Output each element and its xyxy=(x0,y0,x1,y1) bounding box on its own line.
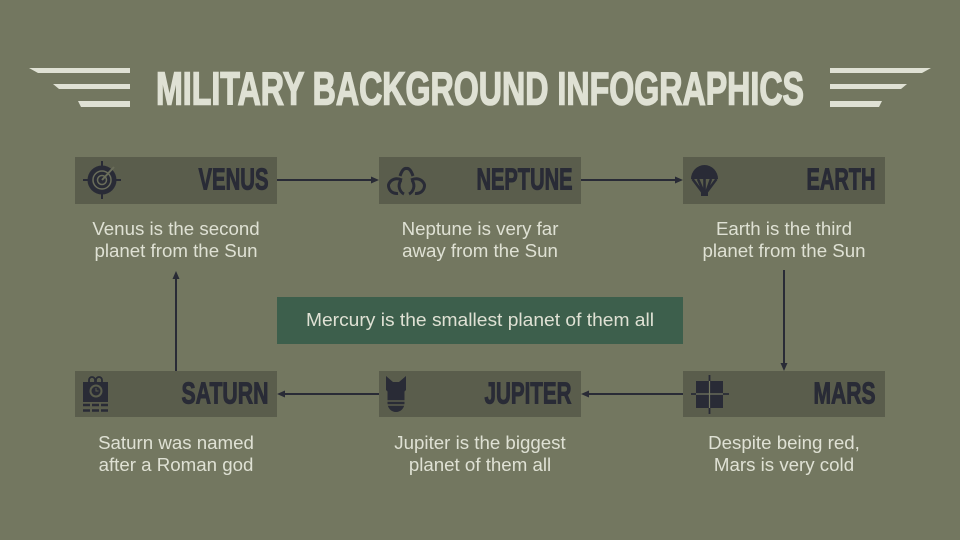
panel: Jupiter xyxy=(379,371,581,417)
text: Neptune description: Neptune is very far xyxy=(402,218,558,239)
text: Venus description: Venus is the second xyxy=(92,218,260,239)
arrow: Neptune to Earth xyxy=(581,176,683,184)
left wing decoration xyxy=(29,68,130,107)
text: Venus description: planet from the Sun xyxy=(94,240,258,261)
icon: handcuffs xyxy=(388,168,425,194)
arrow: Venus to Neptune xyxy=(277,176,379,184)
text: Earth description xyxy=(702,218,866,261)
icon: bomb xyxy=(386,376,406,412)
arrow: Jupiter to Saturn xyxy=(277,390,379,398)
panel: Mars xyxy=(683,371,885,417)
label: Saturn: SATURN xyxy=(182,376,268,410)
text: Venus description xyxy=(92,218,260,261)
text: Earth description: planet from the Sun xyxy=(702,240,866,261)
text: Mars description: Mars is very cold xyxy=(714,454,854,475)
text: Saturn description xyxy=(98,432,254,475)
label: Mars: MARS xyxy=(814,376,876,410)
label: Neptune: NEPTUNE xyxy=(476,162,572,196)
text: Jupiter description xyxy=(394,432,567,475)
text: Neptune description xyxy=(402,218,558,261)
panel: Earth xyxy=(683,157,885,204)
text: Earth description: Earth is the third xyxy=(716,218,852,239)
arrow: Saturn to Venus xyxy=(172,271,180,371)
icon: parachute xyxy=(691,165,718,196)
icon: radar target xyxy=(83,161,121,199)
callout: Mercury: Mercury is the smallest planet of them all xyxy=(306,309,654,330)
text: Saturn description: after a Roman god xyxy=(99,454,253,475)
panel: Venus xyxy=(75,157,277,204)
label: Venus: VENUS xyxy=(198,162,268,196)
text: Jupiter description: planet of them all xyxy=(409,454,551,475)
text: Saturn description: Saturn was named xyxy=(98,432,254,453)
panel: Neptune xyxy=(379,157,581,204)
panel: Saturn xyxy=(75,371,277,417)
label: Jupiter: JUPITER xyxy=(484,376,572,410)
arrow: Earth to Mars xyxy=(780,270,788,371)
text: Mars description: Despite being red, xyxy=(708,432,860,453)
text: Jupiter description: Jupiter is the biggest xyxy=(394,432,567,453)
icon: dynamite xyxy=(83,377,108,410)
callout: Mercury xyxy=(277,297,683,344)
right wing decoration xyxy=(830,68,931,107)
icon: crosshair map xyxy=(691,375,729,414)
arrow: Mars to Jupiter xyxy=(581,390,683,398)
text: Mars description xyxy=(708,432,860,475)
label: Earth: EARTH xyxy=(806,162,876,196)
text: Neptune description: away from the Sun xyxy=(402,240,558,261)
